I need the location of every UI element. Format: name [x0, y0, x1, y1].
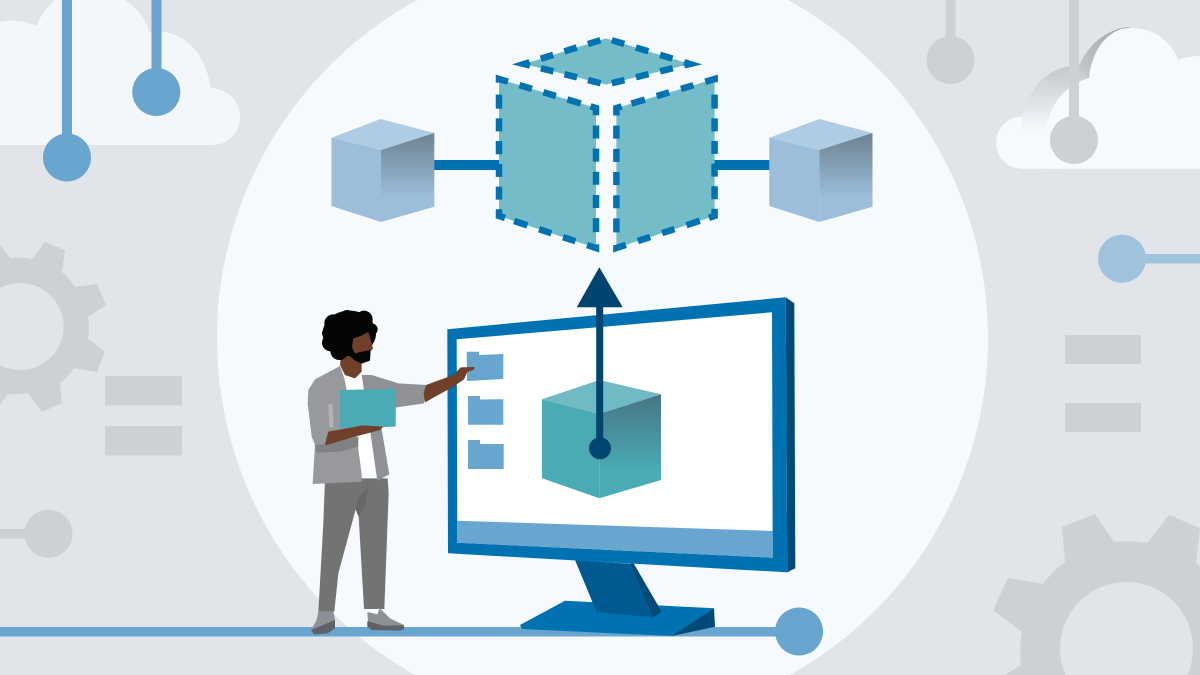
- folder 2: [468, 396, 503, 425]
- hair: [322, 310, 378, 360]
- right blue node: [1098, 235, 1200, 283]
- monitor frame: [447, 297, 787, 572]
- dashed cube left face: [499, 79, 596, 248]
- pointing arm: [424, 367, 474, 402]
- folder 1: [467, 352, 503, 381]
- face: [352, 332, 373, 358]
- person: [308, 310, 474, 635]
- small cube left: [331, 119, 434, 222]
- monitor screen: [457, 312, 773, 558]
- upward arrow: [577, 267, 623, 459]
- left shoe: [311, 612, 335, 635]
- lower arm: [325, 425, 383, 445]
- jacket: [308, 366, 427, 484]
- right shoe: [367, 608, 404, 631]
- bottom line: [0, 608, 823, 656]
- right gear: [993, 514, 1200, 675]
- monitor side: [786, 297, 795, 572]
- dashed cube: [499, 38, 715, 248]
- left bars: [105, 376, 182, 456]
- left cloud node 2: [132, 0, 180, 116]
- right cloud node: [1050, 0, 1098, 164]
- laptop: [340, 389, 396, 428]
- folder 3: [468, 440, 504, 469]
- right bars: [1065, 335, 1141, 432]
- monitor base: [520, 601, 715, 636]
- taskbar: [457, 521, 773, 558]
- connector right: [714, 160, 770, 170]
- trousers: [318, 478, 389, 612]
- left lower node: [0, 510, 72, 558]
- central circle: [217, 0, 988, 675]
- left cloud: [0, 0, 240, 145]
- monitor: [447, 297, 795, 636]
- left cloud node 1: [43, 0, 91, 182]
- right cloud: [996, 27, 1200, 169]
- teal cube: [542, 380, 661, 498]
- connector left: [434, 160, 500, 170]
- top right node: [926, 0, 974, 84]
- t-shirt: [345, 375, 375, 474]
- neck: [340, 355, 362, 378]
- small cube right: [769, 119, 872, 222]
- left gear: [0, 242, 106, 412]
- dashed cube right face: [616, 79, 715, 248]
- dashed cube top face: [524, 38, 690, 85]
- monitor neck: [575, 560, 662, 617]
- beard: [350, 346, 371, 364]
